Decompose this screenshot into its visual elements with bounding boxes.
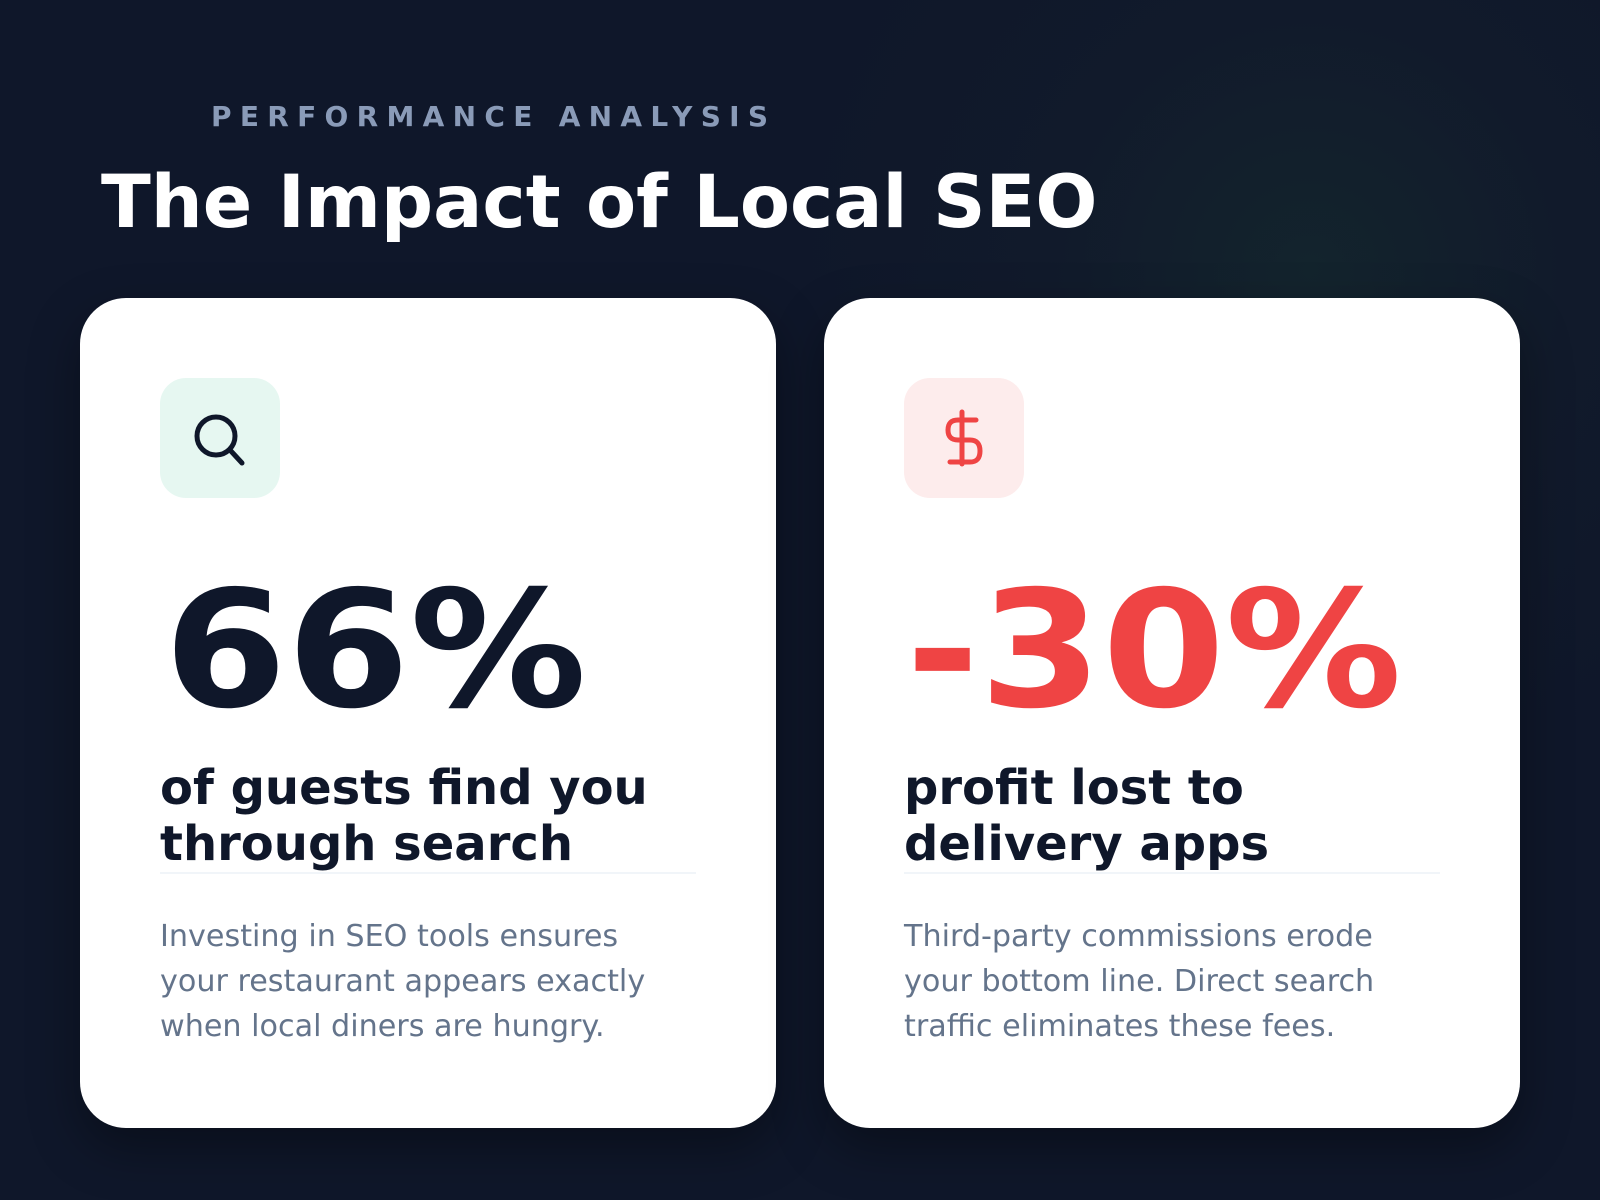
icon: search [160, 378, 280, 498]
description: Investing in SEO tools ensures your restaurant appears exactly when local diners are hungry. [160, 919, 645, 1044]
big number 66%: 66% [164, 557, 587, 745]
panel: delivery apps stat [824, 298, 1520, 1128]
eyebrow label: PERFORMANCE ANALYSIS [211, 100, 776, 133]
icon: dollar [904, 378, 1024, 498]
panel: search stat [80, 298, 776, 1128]
description: Third-party commissions erode your bottom line. Direct search traffic eliminates these fees. [904, 919, 1374, 1044]
heading: profit lost to delivery apps [904, 760, 1269, 872]
big number -30%: -30% [906, 557, 1402, 745]
title: The Impact of Local SEO [101, 160, 1097, 245]
heading: of guests find you through search [160, 760, 648, 872]
